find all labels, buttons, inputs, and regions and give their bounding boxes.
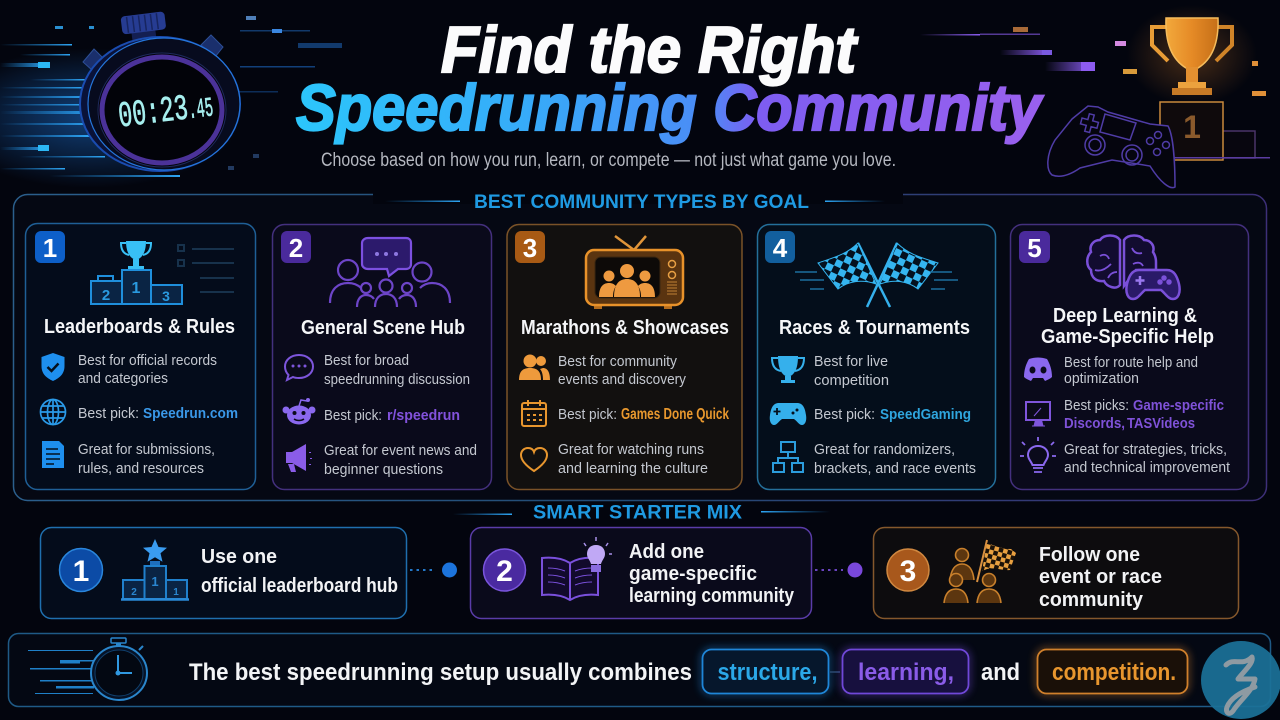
text: event or race <box>1039 566 1162 588</box>
row: best pick: Best pick: <box>814 407 875 423</box>
icon: brain and controller <box>1087 236 1180 299</box>
badge 5 <box>1019 231 1050 263</box>
text: Use one <box>201 546 277 568</box>
row: best for: Best for live <box>814 354 888 370</box>
row: great for: Great for submissions, <box>78 442 215 458</box>
row: best picks: TASVideos <box>1127 416 1195 432</box>
row: best for: speedrunning discussion <box>324 372 470 388</box>
text: Follow one <box>1039 544 1140 566</box>
row: best pick: Best pick: <box>324 408 382 424</box>
badge 5: 5 <box>1027 233 1042 263</box>
row: best for <box>285 353 470 388</box>
card 1: leaderboards and rules <box>26 224 256 490</box>
heading: Deep Learning & <box>1053 305 1197 327</box>
text: community <box>1039 589 1144 611</box>
row: best for: Best for official records <box>78 353 217 369</box>
text <box>1039 544 1162 611</box>
row: best picks: Game-specific <box>1133 398 1224 414</box>
row: great for <box>1020 437 1230 476</box>
icon: crossed checkered flags <box>795 243 958 307</box>
row: great for <box>773 442 976 477</box>
row: best pick: Best pick: <box>558 407 617 423</box>
heading: General Scene Hub <box>301 317 465 339</box>
icon: podium with trophy: 1 <box>132 280 141 297</box>
row: great for: Great for watching runs <box>558 442 704 458</box>
row: best for: Best for broad <box>324 353 409 369</box>
pill: competition <box>1038 650 1188 694</box>
number circle 3 <box>887 549 929 591</box>
podium: 1 <box>1183 109 1201 145</box>
row: best pick: Best pick: <box>78 406 139 422</box>
header illustration: trophy, podium and controller <box>920 5 1270 188</box>
section heading: best community types <box>373 192 903 213</box>
row: great for <box>521 442 708 477</box>
row: best pick: SpeedGaming <box>880 407 971 423</box>
connector 2 to 3 <box>815 562 862 578</box>
pill: learning <box>842 650 968 694</box>
row: great for: Great for event news and <box>324 443 477 459</box>
title: Speedrunning Community <box>296 71 1044 144</box>
badge 4: 4 <box>773 233 788 263</box>
title <box>296 13 1044 144</box>
row: best picks: Discords, <box>1064 416 1125 432</box>
subtitle: Choose based on how you run, learn, or compete — not just what game you love. <box>321 150 896 171</box>
icon: podium with star: 1 <box>173 587 179 598</box>
pill: learning: learning, <box>858 659 954 686</box>
icon: open book with light bulb <box>542 537 612 600</box>
row: best pick: r/speedrun <box>387 408 460 424</box>
row: great for: brackets, and race events <box>814 461 976 477</box>
number circle 1: 1 <box>73 555 89 588</box>
pill: structure: structure, <box>718 659 818 686</box>
section heading: best community types: BEST COMMUNITY TYPES BY GOAL <box>474 192 809 213</box>
row: best pick: Games Done Quick <box>621 406 729 423</box>
row: best for <box>519 354 687 388</box>
number circle 3: 3 <box>900 555 916 588</box>
card 4: races and tournaments <box>758 224 996 490</box>
row: great for: and learning the culture <box>558 461 708 477</box>
step 1: leaderboard hub <box>40 528 406 618</box>
text: Add one <box>629 541 704 563</box>
text: official leaderboard hub <box>201 575 398 597</box>
icon: group with speech bubble <box>330 238 450 307</box>
row: best for <box>42 353 217 387</box>
row: best for: and categories <box>78 371 168 387</box>
trophy <box>1152 18 1232 95</box>
row: best pick <box>770 403 971 425</box>
icon: podium with trophy: 2 <box>102 287 110 304</box>
takeaway sentence: The best speedrunning setup usually combines <box>189 659 692 686</box>
row: best pick <box>40 400 238 424</box>
row: great for: and technical improvement <box>1064 460 1230 476</box>
card 2: general scene hub <box>272 224 492 490</box>
row: best picks: Best picks: <box>1064 398 1129 414</box>
row: best for: competition <box>814 373 889 389</box>
step 2: learning community <box>470 528 812 618</box>
heading: Game-Specific Help <box>1041 326 1214 348</box>
row: best pick <box>282 398 460 424</box>
row: great for <box>286 443 477 478</box>
row: best for: optimization <box>1064 371 1139 387</box>
text <box>201 546 398 597</box>
watermark logo <box>1201 641 1280 719</box>
card 3: marathons and showcases <box>507 224 742 490</box>
row: great for: Great for strategies, tricks, <box>1064 442 1227 458</box>
heading <box>1041 305 1214 348</box>
badge 4 <box>765 231 795 263</box>
icon: podium with trophy: 3 <box>162 288 170 304</box>
icon: podium with trophy <box>91 241 234 304</box>
number circle 2 <box>484 549 526 591</box>
icon: podium with star: 1 <box>151 574 159 589</box>
badge 3 <box>515 231 545 263</box>
row: best for: Best for route help and <box>1064 355 1198 371</box>
icon: podium with star <box>121 539 189 600</box>
card 5: deep learning and game-specific help <box>1010 224 1248 490</box>
icon: retro tv with audience <box>586 236 683 309</box>
row: great for: Great for randomizers, <box>814 442 955 458</box>
step 3: event or race community <box>874 528 1238 618</box>
heading: Races & Tournaments <box>779 317 970 339</box>
row: best for: Best for community <box>558 354 678 370</box>
row: great for: rules, and resources <box>78 461 204 477</box>
icon: small stopwatch with speed lines <box>28 638 147 700</box>
row: best for <box>772 354 889 389</box>
badge 3: 3 <box>523 233 537 263</box>
row: best picks <box>1026 398 1224 432</box>
panel: best community types <box>14 192 1266 500</box>
badge 2 <box>281 231 311 263</box>
text: learning community <box>629 585 795 607</box>
badge 2: 2 <box>289 233 303 263</box>
connector 1 to 2 <box>410 562 457 578</box>
text: game-specific <box>629 563 757 585</box>
pill: competition: competition. <box>1052 659 1176 686</box>
badge 1: 1 <box>43 233 57 263</box>
word: and: and <box>981 659 1020 686</box>
podium <box>1160 102 1270 160</box>
stopwatch crown <box>120 11 168 46</box>
header illustration: stopwatch with speed lines <box>0 11 342 188</box>
text <box>629 541 795 607</box>
section heading: smart starter mix: SMART STARTER MIX <box>533 502 742 524</box>
row: great for <box>42 441 215 477</box>
heading: Marathons & Showcases <box>521 317 729 339</box>
title: Find the Right <box>441 13 858 86</box>
bottom takeaway banner <box>8 634 1270 706</box>
row: best for <box>1024 355 1198 387</box>
stopwatch digital time: 00:23 <box>116 88 191 138</box>
heading: Leaderboards & Rules <box>44 316 235 338</box>
number circle 1 <box>60 548 102 592</box>
controller <box>1048 106 1175 188</box>
stopwatch digital time: .45 <box>187 94 215 127</box>
pill: structure <box>702 650 828 694</box>
number circle 2: 2 <box>496 555 513 588</box>
icon: podium with star: 2 <box>131 587 137 598</box>
badge 1 <box>35 231 65 263</box>
row: best pick <box>522 400 729 426</box>
icon: people with checkered flag <box>944 540 1016 603</box>
row: best pick: Speedrun.com <box>143 406 238 422</box>
row: best for: events and discovery <box>558 372 687 388</box>
row: great for: beginner questions <box>324 462 443 478</box>
